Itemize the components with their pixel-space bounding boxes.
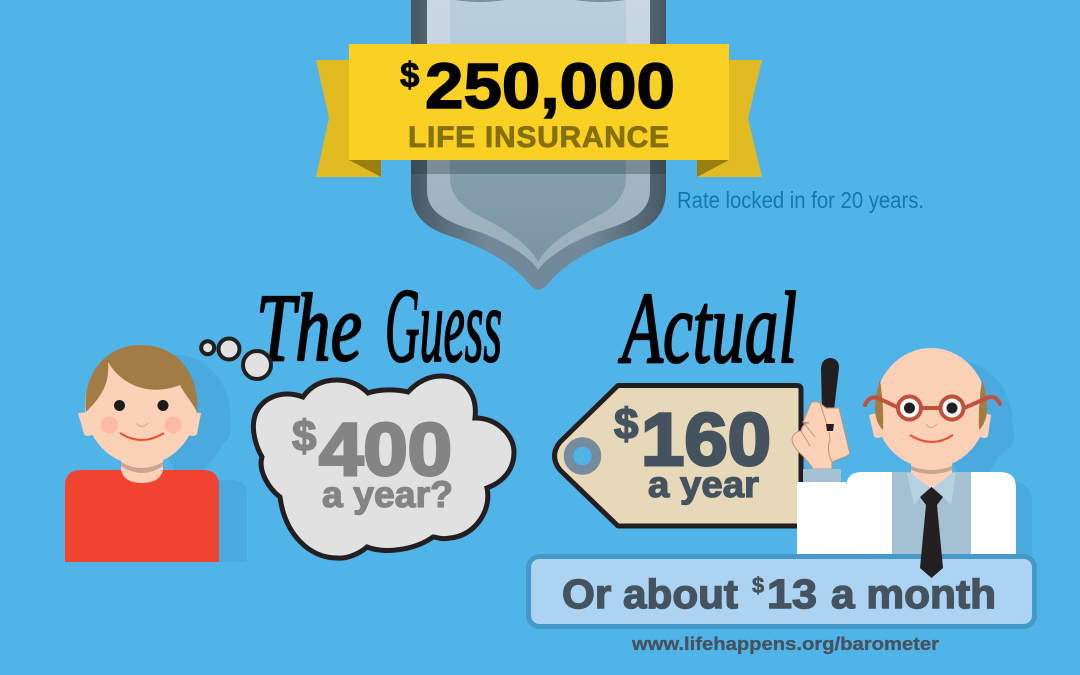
monthly callout: a month	[831, 571, 996, 617]
man glasses	[865, 396, 1000, 420]
banner ribbon	[316, 44, 762, 177]
heading: actual: Actual	[618, 272, 797, 385]
character: man shadow	[930, 360, 1032, 555]
monthly callout: 13	[767, 571, 817, 617]
price tag	[554, 386, 801, 526]
man sleeve	[797, 482, 846, 555]
man smile	[910, 435, 953, 442]
banner label: LIFE INSURANCE	[408, 121, 669, 154]
boy neck	[121, 455, 163, 483]
guess amount: 400	[319, 408, 452, 491]
boy head	[85, 345, 197, 465]
man hand	[792, 402, 850, 469]
man eyes	[904, 402, 958, 414]
boy shirt	[65, 470, 219, 562]
man neck	[911, 455, 952, 489]
man collar	[907, 473, 956, 505]
banner amount: 250,000	[425, 50, 675, 122]
man cuff	[803, 469, 841, 483]
monthly callout: $	[752, 573, 764, 598]
text: Guess	[385, 267, 502, 384]
boy eyes	[114, 400, 168, 411]
actual period: a year	[648, 464, 759, 505]
heading: the guess	[256, 267, 502, 384]
man hair	[875, 380, 987, 430]
guess period: a year?	[322, 474, 453, 515]
character: boy	[65, 345, 247, 562]
thought cloud	[253, 376, 514, 558]
character: man	[792, 348, 1016, 555]
tag hole	[568, 442, 596, 470]
man ears	[869, 412, 991, 438]
website url: www.lifehappens.org/barometer	[631, 633, 939, 654]
man vest	[892, 472, 971, 555]
icon: shield	[411, 0, 666, 290]
boy cheeks	[101, 416, 182, 434]
man tie	[920, 487, 943, 578]
banner amount: $	[400, 56, 419, 95]
man shirt	[846, 472, 1016, 555]
man pen	[821, 358, 839, 410]
boy hair	[86, 345, 197, 412]
boy smile	[120, 433, 164, 440]
monthly callout: Or about	[562, 571, 738, 617]
thought bubbles	[201, 338, 271, 379]
guess amount: $	[292, 412, 316, 461]
heading: the guess: The	[256, 274, 362, 381]
boy shadow	[140, 355, 247, 562]
monthly callout	[528, 556, 1034, 626]
actual amount: $	[614, 400, 638, 449]
rate note: Rate locked in for 20 years.	[677, 187, 924, 213]
boy ears	[78, 412, 201, 436]
man head	[875, 348, 987, 468]
actual amount: 160	[641, 398, 771, 481]
